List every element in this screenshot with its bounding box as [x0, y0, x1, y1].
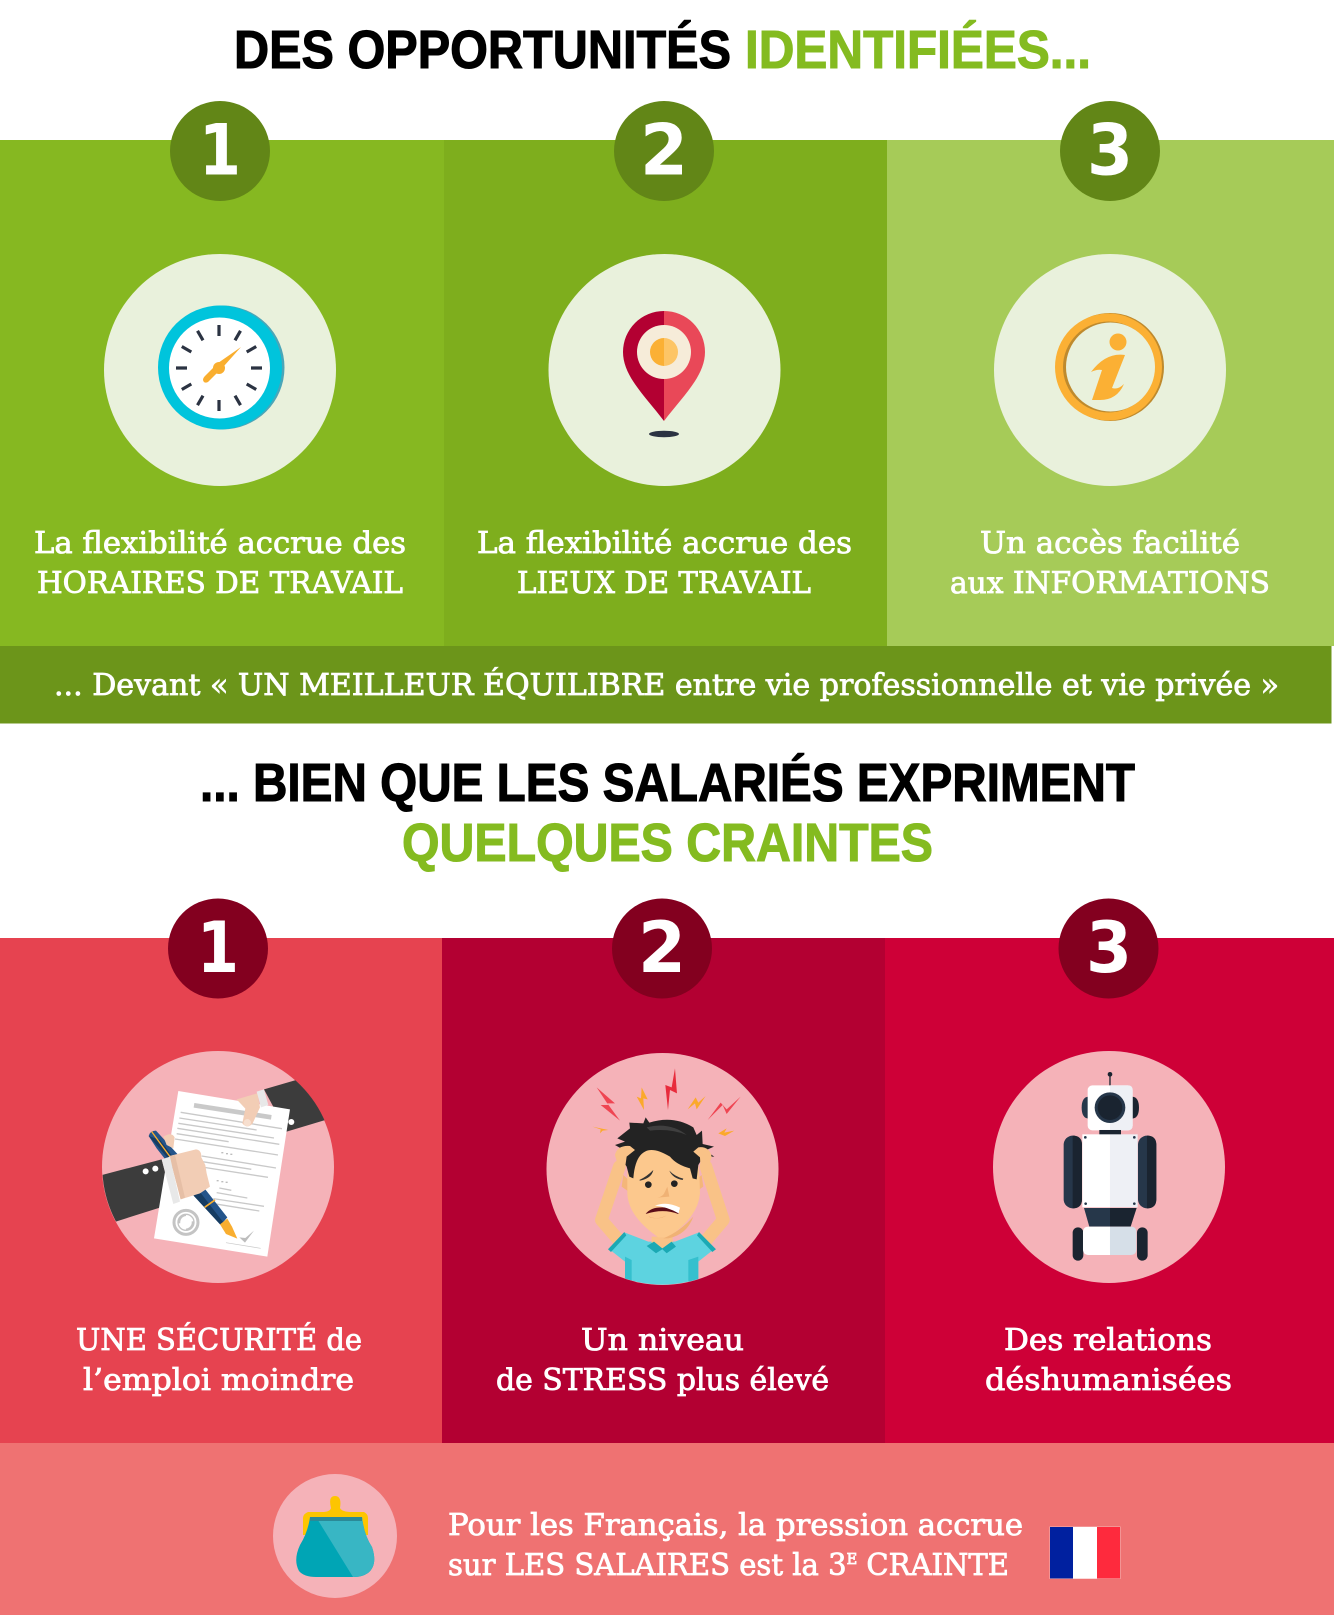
number badge 1: 1 — [197, 907, 239, 989]
panel: fear 3 dehumanised relations — [885, 898, 1334, 1443]
number badge 1 — [168, 898, 268, 998]
title: fears — [200, 753, 1135, 873]
text: flexible places: LIEUX DE TRAVAIL — [517, 566, 811, 601]
icon circle: information — [994, 254, 1226, 486]
number badge 3: 3 — [1086, 907, 1132, 989]
text: flexible hours: La flexibilité accrue des — [34, 526, 406, 561]
icon: French flag — [1050, 1526, 1120, 1579]
text: stress: de STRESS plus élevé — [496, 1363, 829, 1398]
text: pressure on salaries: sur LES SALAIRES est la 3 — [448, 1548, 860, 1583]
text: stress — [496, 1323, 829, 1398]
title: opportunities — [234, 20, 1091, 80]
text: job security: l’emploi moindre — [83, 1363, 354, 1398]
icon circle: purse — [273, 1474, 397, 1598]
number badge 1 — [170, 101, 270, 201]
text: access to information: aux INFORMATIONS — [950, 566, 1270, 601]
banner: better work-life balance — [0, 646, 1332, 724]
text: pressure on salaries — [448, 1508, 1023, 1583]
icon circle: robot — [993, 1051, 1225, 1283]
number badge 3 — [1058, 898, 1158, 998]
text: flexible hours — [34, 526, 406, 601]
title: fears: QUELQUES CRAINTES — [402, 813, 933, 873]
banner: better work-life balance: ... Devant « UN MEILLEUR ÉQUILIBRE entre vie professionnelle et vie privée » — [54, 667, 1279, 703]
number badge 1: 1 — [199, 110, 241, 192]
number badge 3: 3 — [1087, 110, 1133, 192]
number badge 3 — [1060, 101, 1160, 201]
text: stress: Un niveau — [581, 1323, 744, 1358]
title: opportunities: IDENTIFIÉES... — [745, 20, 1091, 80]
text: pressure on salaries: Pour les Français, la pression accrue — [448, 1508, 1023, 1543]
text: flexible hours: HORAIRES DE TRAVAIL — [37, 566, 403, 601]
text: flexible places: La flexibilité accrue des — [477, 526, 852, 561]
text: flexible places — [477, 526, 852, 601]
icon circle: stressed man — [546, 1053, 778, 1287]
panel: opportunity 1 flexible hours — [0, 101, 444, 646]
text: dehumanised relations — [985, 1323, 1232, 1398]
text: job security: UNE SÉCURITÉ de — [76, 1322, 362, 1358]
text: dehumanised relations: Des relations — [1004, 1323, 1212, 1358]
panel: fear 2 stress — [442, 898, 885, 1443]
panel: opportunity 3 access to information — [887, 101, 1334, 646]
banner: pressure on salaries in France — [0, 1443, 1334, 1615]
number badge 2: 2 — [638, 907, 686, 989]
number badge 2 — [614, 101, 714, 201]
number badge 2: 2 — [640, 110, 688, 192]
title: opportunities: DES OPPORTUNITÉS — [234, 20, 731, 80]
title: fears: ... BIEN QUE LES SALARIÉS EXPRIMENT — [200, 753, 1135, 813]
panel: opportunity 2 flexible places — [444, 101, 887, 646]
icon circle: clock — [104, 254, 336, 486]
text: job security — [76, 1322, 362, 1398]
icon circle: location pin — [548, 254, 780, 486]
panel: fear 1 job security — [0, 898, 442, 1443]
text: access to information: Un accès facilité — [980, 526, 1240, 561]
number badge 2 — [612, 898, 712, 998]
text: pressure on salaries: E — [847, 1550, 857, 1568]
text: pressure on salaries: CRAINTE — [857, 1548, 1009, 1583]
icon circle: contract signing — [93, 1051, 337, 1283]
text: dehumanised relations: déshumanisées — [985, 1363, 1232, 1398]
text: access to information — [950, 526, 1270, 601]
